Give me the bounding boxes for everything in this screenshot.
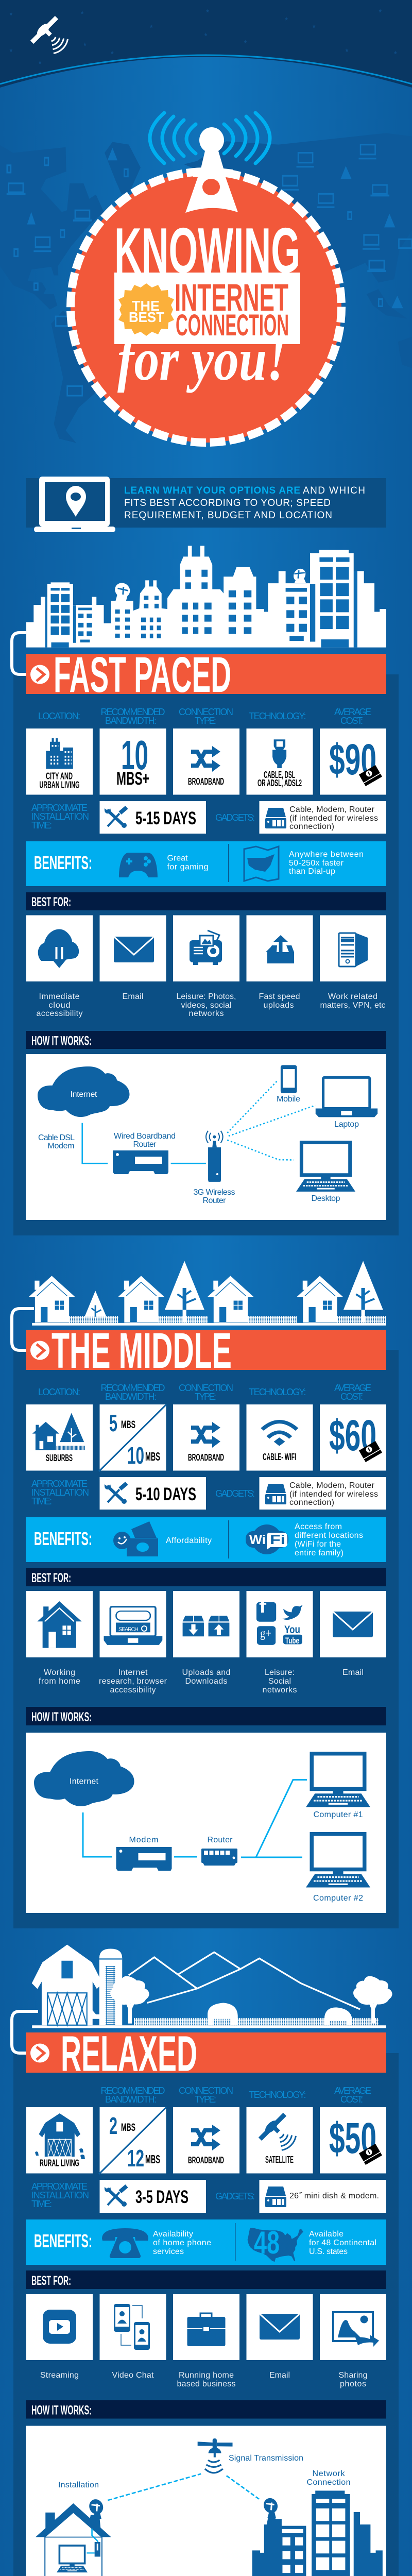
best for bar <box>26 1568 386 1586</box>
column labels: BANDWIDTH: <box>105 716 157 726</box>
column labels: TECHNOLOGY: <box>249 2090 306 2100</box>
intro text: AND WHICH <box>303 485 365 496</box>
tile: bandwidth 5 to 10 mbs: MBS <box>145 1450 160 1463</box>
title badge: orange circle with dashed ring <box>71 172 341 443</box>
best for captions: based business <box>177 2380 236 2388</box>
box: gadgets: connection) <box>289 1498 334 1507</box>
tile: bandwidth 2 to 12 mbs: MBS <box>121 2122 135 2133</box>
tile: bandwidth 2 to 12 mbs: 2 <box>109 2112 117 2139</box>
best for captions <box>39 1668 364 1694</box>
best for captions: matters, VPN, etc <box>320 1001 385 1010</box>
column labels: AVERAGE <box>334 707 371 717</box>
benefits band: BENEFITS: <box>34 852 92 873</box>
best for captions: Working <box>44 1668 75 1677</box>
diagram: how relaxed works: Signal Transmission <box>229 2454 303 2463</box>
tile: bandwidth 10 mbs <box>100 728 166 794</box>
tile: social networks <box>246 1591 313 1657</box>
tile: cost 50 <box>320 2107 386 2173</box>
box: install days: 3-5 DAYS <box>135 2187 188 2207</box>
label: gadgets: GADGETS: <box>215 1488 255 1499</box>
tile: suburbs <box>26 1404 93 1470</box>
column labels: TYPE: <box>195 2094 216 2105</box>
best for captions: Downloads <box>185 1677 228 1686</box>
benefits band: for 48 Continental <box>309 2239 376 2247</box>
tile: bandwidth 5 to 10 mbs: 10 <box>127 1442 144 1469</box>
tile: email <box>320 1591 386 1657</box>
icon: game controller <box>119 853 158 877</box>
label: installation time: TIME: <box>31 820 52 831</box>
heading banner: relaxed <box>26 2026 386 2081</box>
tile: cable wifi: CABLE- WIFI <box>263 1451 296 1462</box>
tile: email <box>100 915 166 981</box>
tile: broadband: BROADBAND <box>188 776 224 787</box>
label: installation time: INSTALLATION <box>31 2190 89 2200</box>
box: gadgets: (if intended for wireless <box>289 814 378 823</box>
title: white box: INTERNET <box>175 276 288 319</box>
column labels <box>101 2086 371 2105</box>
box: install days <box>100 1477 206 1510</box>
tile: rural living <box>26 2107 93 2173</box>
world map background <box>0 133 412 443</box>
tile: cost 60 <box>320 1404 386 1470</box>
diagram: how fast paced works: Internet <box>70 1090 97 1099</box>
column labels: TECHNOLOGY: <box>249 1387 306 1397</box>
benefits band: services <box>153 2247 184 2256</box>
column labels: LOCATION: <box>38 1387 80 1397</box>
tile: broadband <box>173 2107 239 2173</box>
box: gadgets <box>260 1477 386 1510</box>
benefits band: for gaming <box>167 862 208 872</box>
icon: folded us map <box>244 846 279 881</box>
column labels: TECHNOLOGY: <box>249 711 306 721</box>
tile: suburbs: SUBURBS <box>46 1452 73 1463</box>
tile: satellite: SATELLITE <box>265 2154 294 2165</box>
icon: us map with 48 <box>248 2225 303 2262</box>
tile: social networks: f <box>259 1597 266 1617</box>
diagram: how relaxed works: Installation <box>58 2481 99 2489</box>
best for captions: networks <box>263 1686 297 1694</box>
heading banner: relaxed: RELAXED <box>61 2026 197 2081</box>
column labels: RECOMMENDED <box>101 2086 165 2096</box>
diagram: how fast paced works <box>26 1054 386 1220</box>
how it works bar: HOW IT WORKS: <box>31 1710 92 1724</box>
connector line <box>12 2011 38 2053</box>
title: white box <box>114 273 300 344</box>
title: white box: CONNECTION <box>176 309 289 342</box>
label: installation time <box>31 2181 89 2209</box>
column labels: CONNECTION <box>179 2086 233 2096</box>
benefits band: BENEFITS: <box>34 1528 92 1549</box>
best for captions: accessibility <box>36 1009 82 1018</box>
tile: city and urban living <box>26 728 93 794</box>
best for captions: Leisure: Photos, <box>176 992 236 1001</box>
column labels: LOCATION: <box>38 711 80 721</box>
badge: the best: BEST <box>129 309 164 325</box>
intro text: LEARN WHAT YOUR OPTIONS ARE <box>124 485 300 496</box>
icon: wifi badge: Fi <box>270 1533 285 1547</box>
best for captions: Immediate <box>39 992 80 1001</box>
benefits band: (WiFi for the <box>295 1540 341 1549</box>
tile: bandwidth 10 mbs: 10 <box>121 732 148 778</box>
diagram: how the middle works <box>26 1733 386 1913</box>
badge: the best <box>118 283 174 336</box>
column labels: AVERAGE <box>334 1383 371 1393</box>
icon: wifi badge <box>246 1524 288 1554</box>
tile: broadband: BROADBAND <box>188 2155 224 2165</box>
benefits band: Anywhere between <box>289 850 364 859</box>
panel: the middle background <box>13 1350 399 1928</box>
diagram: how relaxed works: Connection <box>307 2478 350 2487</box>
best for bar: BEST FOR: <box>31 2274 71 2288</box>
icon: satellite <box>32 18 68 54</box>
icon: tower body <box>185 127 238 213</box>
diagram: how fast paced works: Modem <box>47 1142 74 1150</box>
tile: cable dsl: CABLE, DSL <box>264 769 295 780</box>
diagram: how fast paced works: Desktop <box>311 1194 340 1203</box>
intro text: REQUIREMENT, BUDGET AND LOCATION <box>124 510 332 521</box>
connector line <box>12 1309 34 1350</box>
tile: bandwidth 2 to 12 mbs: MBS <box>145 2153 160 2166</box>
label: gadgets: GADGETS: <box>215 812 255 823</box>
heading banner: fast paced: FAST PACED <box>54 647 231 703</box>
tile: cable dsl <box>246 728 313 794</box>
box: gadgets: 26˝ mini dish & modem. <box>289 2192 379 2200</box>
benefits band: BENEFITS: <box>34 2230 92 2251</box>
diagram: how the middle works: Computer #2 <box>313 1894 363 1903</box>
best for captions <box>36 992 385 1018</box>
tile: bandwidth 2 to 12 mbs <box>99 2107 166 2174</box>
best for captions: videos, social <box>181 1001 232 1010</box>
diagram: how fast paced works: Laptop <box>334 1120 359 1129</box>
benefits band: Availability <box>153 2230 193 2239</box>
best for captions: Leisure: <box>265 1668 295 1677</box>
tile: social networks: You <box>284 1624 300 1636</box>
tile: sharing photos <box>320 2294 386 2360</box>
tile: video chat <box>100 2294 166 2360</box>
best for captions: uploads <box>264 1001 294 1010</box>
label: installation time: INSTALLATION <box>31 1487 89 1498</box>
tile: computer tower <box>320 915 386 981</box>
icon: telephone <box>102 2228 148 2258</box>
best for captions: Fast speed <box>259 992 300 1001</box>
benefits band: U.S. states <box>309 2247 348 2256</box>
tile: city and urban living: CITY AND <box>46 771 73 781</box>
best for bar: BEST FOR: <box>31 1571 71 1585</box>
best for captions: Uploads and <box>182 1668 231 1677</box>
benefits band <box>26 2219 386 2265</box>
illustration: farm with barn and mountains <box>32 1945 392 2028</box>
label: installation time: APPROXIMATE <box>31 803 88 813</box>
tile: upload <box>246 915 313 981</box>
tile: cost 90: $90 <box>329 735 376 784</box>
best for captions: Email <box>269 2371 290 2380</box>
tile: social networks: g+ <box>260 1627 271 1640</box>
box: gadgets: Cable, Modem, Router <box>289 1481 375 1490</box>
benefits band <box>26 841 386 886</box>
column labels: COST: <box>340 716 363 726</box>
best for bar <box>26 892 386 910</box>
benefits band: Access from <box>295 1522 342 1531</box>
benefits band: Available <box>309 2230 344 2239</box>
tile: bandwidth 2 to 12 mbs: 12 <box>127 2145 144 2172</box>
box: install days: 5-15 DAYS <box>135 808 196 828</box>
label: gadgets: GADGETS: <box>215 2191 255 2201</box>
tile: satellite <box>246 2107 313 2173</box>
panel: fast paced background <box>13 674 399 1235</box>
best for captions: accessibility <box>110 1686 156 1694</box>
best for captions: Email <box>123 992 143 1001</box>
connector line <box>12 633 31 674</box>
diagram: how the middle works: Internet <box>70 1777 99 1786</box>
column labels <box>38 1383 371 1402</box>
best for bar <box>26 2270 386 2289</box>
benefits band: different locations <box>295 1531 363 1540</box>
diagram: how fast paced works: Router <box>203 1196 226 1205</box>
tile: city and urban living: URBAN LIVING <box>39 779 79 790</box>
best for captions: Work related <box>328 992 377 1001</box>
best for bar: BEST FOR: <box>31 895 71 909</box>
diagram: how fast paced works: 3G Wireless <box>194 1188 235 1197</box>
column labels <box>38 707 371 726</box>
column labels: COST: <box>340 2094 363 2105</box>
column labels: TYPE: <box>195 1392 216 1402</box>
tile: broadband: BROADBAND <box>188 1452 224 1463</box>
best for captions: from home <box>39 1677 80 1686</box>
column labels: AVERAGE <box>334 2086 371 2096</box>
best for captions: Running home <box>179 2371 234 2380</box>
best for captions: networks <box>188 1009 224 1018</box>
icon: us map with 48: 48 <box>254 2225 280 2261</box>
best for captions: photos <box>340 2380 366 2388</box>
diagram: how the middle works: Modem <box>129 1836 159 1844</box>
night sky header <box>0 0 412 88</box>
how it works bar <box>26 1707 386 1725</box>
diagram: how the middle works: Computer #1 <box>313 1810 363 1819</box>
benefits band: of home phone <box>153 2239 211 2247</box>
column labels: BANDWIDTH: <box>105 1392 157 1402</box>
best for captions: Internet <box>118 1668 148 1677</box>
section: relaxed <box>12 1945 399 2576</box>
intro text <box>124 485 365 521</box>
benefits band: Great <box>167 854 188 862</box>
tile: bandwidth 5 to 10 mbs: 5 <box>109 1410 117 1436</box>
tile: running home based business <box>173 2294 239 2360</box>
heading banner: the middle: THE MIDDLE <box>52 1323 232 1379</box>
tile: streaming <box>26 2294 93 2360</box>
how it works bar: HOW IT WORKS: <box>31 1033 92 1048</box>
tile: social networks: Tube <box>285 1636 299 1646</box>
tile: broadband <box>173 728 239 794</box>
diagram: how fast paced works: Wired Boardband <box>114 1132 176 1141</box>
diagram: how relaxed works <box>26 2426 386 2576</box>
column labels: BANDWIDTH: <box>105 2094 157 2105</box>
icon: wifi badge: Wi <box>249 1533 266 1547</box>
column labels: RECOMMENDED <box>101 707 165 717</box>
best for captions: Email <box>342 1668 364 1677</box>
box: install days: 5-10 DAYS <box>135 1484 196 1504</box>
panel: relaxed background <box>13 2053 399 2576</box>
diagram: how fast paced works: Cable DSL <box>38 1133 75 1142</box>
box: install days <box>100 2180 206 2213</box>
section: fast paced <box>12 546 399 1235</box>
tile: cable dsl: OR ADSL, ADSL2 <box>258 777 302 788</box>
column labels: TYPE: <box>195 716 216 726</box>
best for captions <box>40 2371 368 2388</box>
label: installation time: TIME: <box>31 1496 52 1506</box>
box: gadgets: (if intended for wireless <box>289 1490 378 1499</box>
benefits band: entire family) <box>295 1549 344 1557</box>
benefits band: than Dial-up <box>289 867 335 876</box>
label: installation time: TIME: <box>31 2199 52 2209</box>
illustration: suburban houses <box>29 1261 386 1326</box>
label: installation time <box>31 803 89 831</box>
best for captions: Video Chat <box>112 2371 154 2380</box>
tile: internet research <box>100 1591 166 1657</box>
best for captions: Sharing <box>339 2371 368 2380</box>
intro banner <box>26 477 386 532</box>
tile: broadband <box>173 1404 239 1470</box>
tile: email <box>246 2294 313 2360</box>
label: installation time: APPROXIMATE <box>31 1479 88 1489</box>
icon: broadcast tower with signal arcs <box>150 113 270 163</box>
tile: work from home <box>26 1591 93 1657</box>
how it works bar <box>26 1031 386 1049</box>
label: installation time: APPROXIMATE <box>31 2181 88 2192</box>
label: installation time <box>31 1479 89 1506</box>
box: gadgets: Cable, Modem, Router <box>289 805 375 814</box>
best for captions: Streaming <box>40 2371 79 2380</box>
icon: money with smile <box>113 1521 158 1556</box>
column labels: COST: <box>340 1392 363 1402</box>
tile: cost 60: $60 <box>329 1411 376 1460</box>
box: install days <box>100 801 206 834</box>
badge: the best: THE <box>132 298 160 314</box>
how it works bar <box>26 2400 386 2418</box>
intro text: FITS BEST ACCORDING TO YOUR; SPEED <box>124 498 331 509</box>
column labels: RECOMMENDED <box>101 1383 165 1393</box>
tile: cloud download <box>26 915 93 981</box>
column labels: CONNECTION <box>179 707 233 717</box>
diagram: how fast paced works: Mobile <box>277 1095 300 1104</box>
column labels: CONNECTION <box>179 1383 233 1393</box>
diagram: how relaxed works: Network <box>312 2469 345 2478</box>
box: gadgets: connection) <box>289 822 334 831</box>
tile: bandwidth 10 mbs: MBS+ <box>116 769 149 789</box>
tile: uploads and downloads <box>173 1591 239 1657</box>
how it works bar: HOW IT WORKS: <box>31 2403 92 2417</box>
title: for you: for you! <box>117 326 286 393</box>
benefits band: 50-250x faster <box>289 859 344 868</box>
best for captions: Social <box>268 1677 291 1686</box>
tile: photos projector <box>173 915 239 981</box>
tile: cable wifi <box>246 1404 313 1470</box>
tile: bandwidth 5 to 10 mbs: MBS <box>121 1419 135 1431</box>
tile: rural living: RURAL LIVING <box>40 2158 79 2168</box>
diagram: how fast paced works: Router <box>133 1140 157 1149</box>
illustration: city skyline <box>26 546 386 648</box>
box: gadgets <box>260 2180 386 2213</box>
best for captions: cloud <box>48 1001 70 1010</box>
best for captions: research, browser <box>99 1677 167 1686</box>
box: gadgets <box>260 801 386 834</box>
benefits band: Affordability <box>166 1536 212 1545</box>
tile: cost 90 <box>320 728 386 794</box>
tile: cost 50: $50 <box>329 2114 376 2162</box>
benefits band <box>26 1517 386 1562</box>
label: installation time: INSTALLATION <box>31 811 89 822</box>
tile: internet research: SEARCH <box>118 1626 139 1633</box>
icon: laptop with location pin <box>34 477 115 532</box>
tile: bandwidth 5 to 10 mbs <box>99 1404 166 1471</box>
diagram: how the middle works: Router <box>207 1836 233 1844</box>
section: the middle <box>12 1261 399 1928</box>
